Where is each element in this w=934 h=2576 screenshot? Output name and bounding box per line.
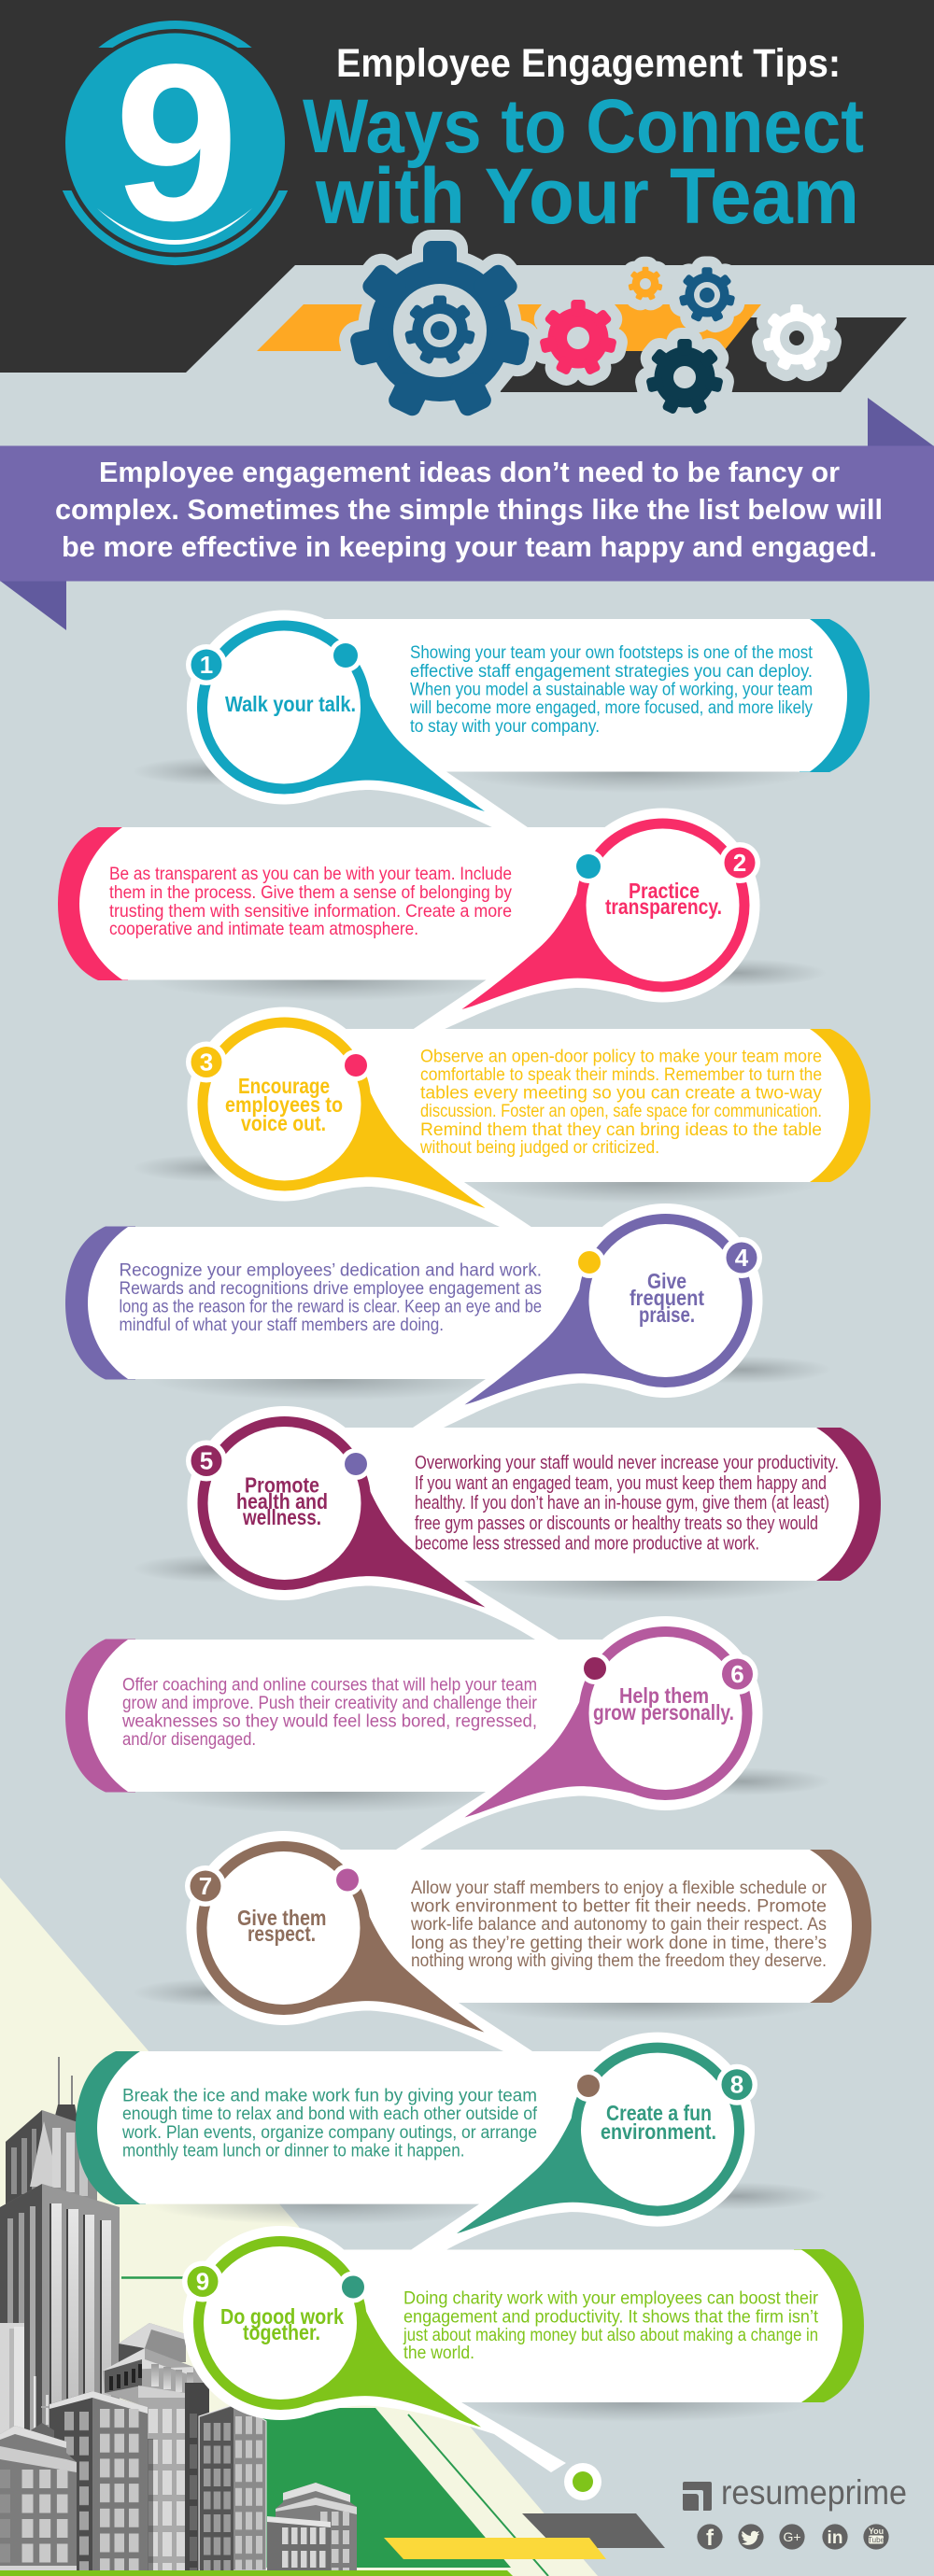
- body text: work-life balance and autonomy to gain their respect. As: [410, 1915, 827, 1935]
- body text: free gym passes or discounts or healthy treats so they would: [415, 1513, 818, 1534]
- icon: youtube: Tube: [868, 2536, 885, 2544]
- tip 9: [182, 2226, 864, 2500]
- shadows: [149, 1767, 831, 1813]
- heading: respect.: [248, 1921, 316, 1946]
- icon: google plus: [779, 2524, 805, 2550]
- body text: Allow your staff members to enjoy a flexible schedule or: [411, 1879, 828, 1898]
- orange parallelogram behind gears: [257, 304, 761, 351]
- white pill: [88, 1640, 603, 1792]
- speech bubble: [187, 611, 530, 829]
- pink gear: [539, 300, 617, 375]
- dark header shape: [0, 0, 934, 373]
- city buildings: [0, 2057, 357, 2570]
- body text: enough time to relax and bond with each other outside of: [122, 2104, 538, 2124]
- body text: them in the process. Give them a sense of belonging by: [109, 883, 512, 903]
- heading: Walk your talk.: [225, 692, 356, 716]
- right building: [199, 2404, 266, 2570]
- number badge: [719, 842, 760, 883]
- logo: [683, 2473, 907, 2512]
- icon: twitter: [738, 2524, 764, 2550]
- intro text: [55, 456, 883, 563]
- heading: Create a fun: [606, 2101, 712, 2125]
- body text: monthly team lunch or dinner to make it happen.: [122, 2142, 465, 2161]
- body text: Overworking your staff would never increase your productivity.: [415, 1453, 839, 1473]
- icon: linkedin: in: [828, 2528, 842, 2548]
- number badge: [182, 2261, 223, 2302]
- number badge: 5: [200, 1447, 213, 1475]
- heading: voice out.: [241, 1111, 326, 1135]
- pill end: [65, 1227, 135, 1380]
- body text: Offer coaching and online courses that will help your team: [122, 1675, 537, 1696]
- yellow bottom shape: [384, 2538, 606, 2559]
- dot: [579, 1653, 611, 1684]
- body text: cooperative and intimate team atmosphere.: [109, 920, 418, 939]
- tip 4: [65, 1204, 831, 1428]
- white pill: [341, 1850, 852, 2003]
- shadows: [133, 1978, 822, 2022]
- icon: youtube: [863, 2524, 889, 2550]
- speech bubble: [187, 1006, 532, 1227]
- heading: Encourage: [238, 1074, 330, 1098]
- heading: environment.: [601, 2119, 716, 2144]
- shadows: [133, 1154, 822, 1204]
- speech bubble: [396, 1616, 762, 1850]
- white pill: [346, 1029, 849, 1182]
- body text: just about making money but also about making a change in: [403, 2326, 818, 2345]
- number badge: [186, 1042, 227, 1083]
- shadows: [149, 959, 827, 1001]
- number badge: 7: [199, 1872, 212, 1900]
- small right buildings: [267, 2483, 357, 2570]
- body text: If you want an engaged team, you must keep them happy and: [415, 1473, 827, 1494]
- body text: Break the ice and make work fun by giving your team: [122, 2086, 537, 2106]
- heading: Help them: [619, 1683, 709, 1708]
- heading: together.: [243, 2320, 320, 2344]
- heading: [236, 1473, 328, 1529]
- body text: and/or disengaged.: [122, 1730, 256, 1750]
- green triangle: [224, 2408, 511, 2568]
- big number 9 badge: [63, 18, 288, 267]
- heading: [225, 1074, 343, 1135]
- intro text: be more effective in keeping your team happy and engaged.: [62, 530, 877, 563]
- logo icon: [683, 2482, 712, 2511]
- pill end: [801, 1850, 871, 2003]
- heading: wellness.: [242, 1505, 321, 1529]
- body text: become less stressed and more productive at work.: [415, 1533, 759, 1554]
- body text: weaknesses so they would feel less bored, regressed,: [121, 1712, 537, 1731]
- title: Employee Engagement Tips:: [336, 41, 841, 86]
- body text: Doing charity work with your employees can boost their: [403, 2289, 819, 2308]
- front left building: [0, 2423, 77, 2570]
- tip 2: [58, 809, 827, 1029]
- medium blue gear: [679, 267, 735, 322]
- dark grey bottom shape: [522, 2513, 665, 2548]
- heading: health and: [236, 1489, 328, 1513]
- intro text: complex. Sometimes the simple things like the list below will: [55, 493, 883, 526]
- heading: Give: [647, 1269, 686, 1293]
- pill end: [76, 2051, 146, 2204]
- heading: Do good work: [220, 2304, 344, 2329]
- body text: Be as transparent as you can be with your team. Include: [109, 865, 512, 884]
- body text: [121, 2086, 538, 2161]
- number badge: 1: [200, 651, 213, 679]
- dot: [340, 1049, 372, 1081]
- title: with Your Team: [315, 152, 859, 240]
- speech bubble: [413, 1204, 762, 1428]
- body text: to stay with your company.: [410, 717, 600, 737]
- intro ribbon left fold: [0, 581, 66, 630]
- title: Ways to Connect: [303, 84, 864, 169]
- body text: mindful of what your staff members are doing.: [120, 1316, 444, 1335]
- body text: long as the reason for the reward is clear. Keep an eye and be: [120, 1298, 542, 1316]
- body text: work environment to better fit their needs. Promote: [410, 1897, 827, 1916]
- heading: frequent: [630, 1286, 704, 1310]
- body text: [121, 1675, 538, 1750]
- intro text: Employee engagement ideas don’t need to be fancy or: [99, 456, 840, 488]
- tip 8: [76, 2033, 827, 2250]
- heading: [593, 1683, 734, 1724]
- body text: comfortable to speak their minds. Remember to turn the: [420, 1065, 822, 1085]
- heading: Give them: [237, 1906, 327, 1930]
- number badge: 6: [730, 1660, 744, 1688]
- body text: grow and improve. Push their creativity and challenge their: [122, 1694, 538, 1713]
- white pill: [344, 2250, 842, 2402]
- big blue gear: [348, 241, 531, 418]
- pill end: [811, 1428, 881, 1581]
- pill end: [58, 827, 128, 980]
- heading: Promote: [245, 1473, 319, 1498]
- white pill: [97, 2051, 600, 2204]
- intro ribbon: [0, 446, 934, 581]
- number badge: 2: [733, 849, 746, 877]
- tip 5: [133, 1406, 881, 1640]
- heading: praise.: [639, 1302, 695, 1327]
- number badge: [721, 1237, 762, 1278]
- heading: transparency.: [605, 894, 722, 919]
- thin green diagonal line: [408, 2414, 548, 2576]
- shadows: [133, 1555, 822, 1602]
- tip 6: [65, 1616, 831, 1850]
- body text: without being judged or criticized.: [419, 1138, 659, 1158]
- number badge: [716, 2064, 757, 2105]
- white pill: [346, 1428, 859, 1581]
- number badge: 9: [196, 2267, 209, 2295]
- body text: tables every meeting so you can create a two-way: [420, 1083, 822, 1104]
- speech bubble: [187, 1831, 532, 2051]
- body text: Rewards and recognitions drive employee engagement as: [120, 1279, 542, 1299]
- body text: long as they’re getting their work done in time, there’s: [411, 1934, 827, 1953]
- body text: healthy. If you don’t have an in-house gym, give them (at least): [415, 1493, 829, 1513]
- body text: Recognize your employees’ dedication and hard work.: [120, 1260, 542, 1281]
- heading: [605, 879, 722, 919]
- body text: When you model a sustainable way of working, your team: [410, 680, 813, 700]
- icon: youtube: You: [869, 2527, 884, 2536]
- dark navy gear: [645, 339, 724, 415]
- dot: [329, 639, 362, 672]
- speech bubble: [413, 809, 760, 1029]
- icon: google plus: G+: [783, 2529, 801, 2544]
- body text: [403, 2289, 819, 2363]
- body text: [410, 1879, 828, 1971]
- heading: Practice: [629, 879, 700, 903]
- heading: [630, 1269, 704, 1327]
- body text: Showing your team your own footsteps is one of the most: [410, 643, 814, 663]
- number badge: 4: [735, 1244, 749, 1272]
- white gear: [762, 304, 831, 371]
- center building: [103, 2323, 209, 2570]
- white pill: [79, 827, 607, 980]
- body text: [409, 643, 814, 737]
- body text: work. Plan events, organize company outings, or arrange: [121, 2123, 537, 2143]
- green bottom strip: [0, 2570, 513, 2576]
- big number 9 badge: 9: [115, 18, 238, 267]
- body text: [419, 1048, 822, 1158]
- speech bubble: [411, 2033, 755, 2250]
- tip 3: [133, 1006, 870, 1227]
- body text: engagement and productivity. It shows that the firm isn’t: [403, 2308, 819, 2327]
- body text: [109, 865, 512, 939]
- body text: Observe an open-door policy to make your team more: [420, 1048, 822, 1066]
- pill end: [794, 2249, 864, 2402]
- intro ribbon right fold: [868, 398, 934, 446]
- small orange gear: [628, 267, 663, 301]
- shadows: [133, 752, 813, 793]
- body text: nothing wrong with giving them the freedom they deserve.: [411, 1951, 827, 1971]
- dark parallelogram behind gears: [500, 317, 907, 392]
- heading: employees to: [225, 1092, 343, 1117]
- body text: the world.: [403, 2344, 474, 2363]
- heading: [220, 2304, 344, 2344]
- pill end: [800, 619, 870, 772]
- dot: [573, 2070, 604, 2102]
- number badge: [186, 644, 227, 685]
- tip 7: [133, 1831, 871, 2051]
- icon: facebook: f: [706, 2526, 715, 2551]
- icon: facebook: [697, 2524, 723, 2551]
- number badge: [185, 1865, 226, 1907]
- body text: [120, 1260, 542, 1335]
- gears illustration: [348, 241, 831, 418]
- body text: will become more engaged, more focused, and more likely: [409, 698, 813, 718]
- pale yellow diagonal: [0, 1878, 598, 2576]
- body text: effective staff engagement strategies you can deploy.: [410, 662, 813, 682]
- white pill: [324, 619, 847, 771]
- pill end: [65, 1640, 135, 1793]
- shadows: [149, 2182, 827, 2225]
- logo wordmark: resumeprime: [721, 2473, 907, 2512]
- dot: [340, 1448, 372, 1480]
- tip 1: [133, 611, 870, 829]
- tall tower: [0, 2057, 120, 2446]
- body text: [415, 1453, 839, 1554]
- speech bubble with long tail: [183, 2226, 601, 2500]
- dot: [337, 2271, 369, 2302]
- dot: [572, 850, 605, 883]
- left building: [34, 2376, 148, 2570]
- body text: trusting them with sensitive information. Create a more: [109, 902, 512, 922]
- dot: [332, 1864, 363, 1895]
- heading: [237, 1906, 327, 1946]
- number badge: 3: [200, 1048, 213, 1076]
- number badge: 8: [730, 2071, 743, 2099]
- white pill: [88, 1227, 603, 1379]
- number badge: [186, 1440, 227, 1481]
- heading: grow personally.: [593, 1700, 734, 1724]
- shadows: [458, 2385, 813, 2422]
- icon: linkedin: [822, 2524, 848, 2550]
- social icons: [697, 2524, 889, 2551]
- speech bubble: [187, 1406, 559, 1640]
- pill end: [800, 1029, 870, 1182]
- thin green horizontal line: [121, 2276, 187, 2279]
- body text: Remind them that they can bring ideas to the table: [420, 1120, 822, 1140]
- dot: [573, 1246, 605, 1278]
- shadows: [149, 1356, 831, 1401]
- heading: [601, 2101, 716, 2144]
- body text: discussion. Foster an open, safe space for communication.: [420, 1102, 822, 1121]
- title: [303, 41, 864, 240]
- number badge: [717, 1654, 758, 1695]
